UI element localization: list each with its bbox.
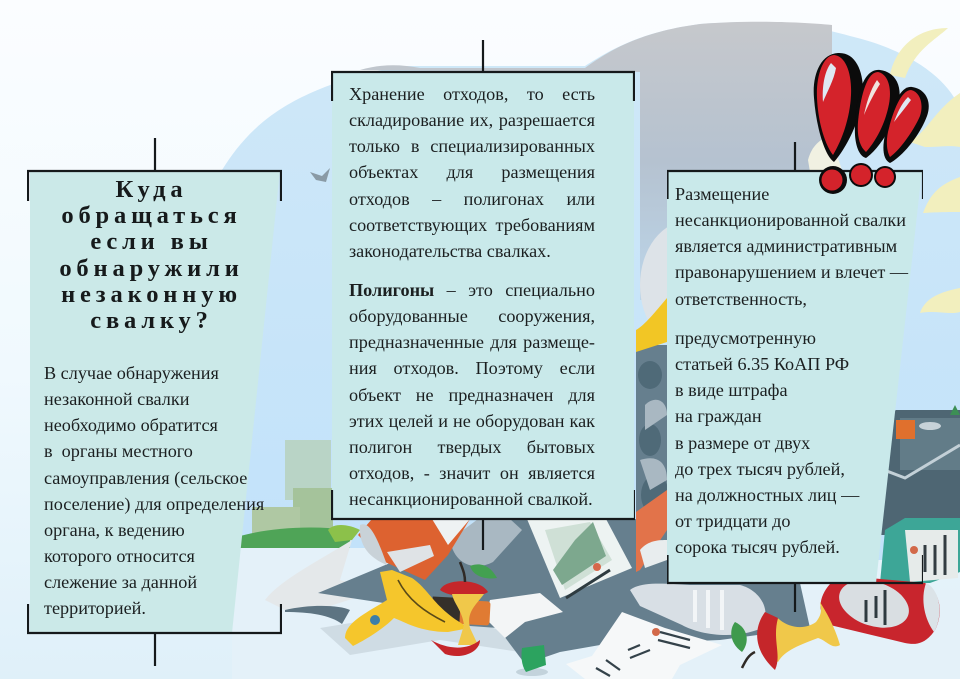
- body text: в органы местного: [44, 441, 193, 461]
- paragraph: fines: статьей 6.35 КоАП РФ: [675, 354, 849, 374]
- paragraph: landfill definition: оборудованные сооружения,: [349, 306, 595, 326]
- panel: storage of waste and landfills: [331, 40, 635, 550]
- teal bottle: [880, 518, 960, 583]
- paragraph: landfill definition: этих целей и не оборудован как: [349, 411, 595, 431]
- apple core left: [431, 562, 497, 656]
- paragraph: fines: на граждан: [675, 406, 762, 426]
- heading: [59, 176, 244, 334]
- body text: слежение за данной: [44, 572, 197, 592]
- paper green: [527, 519, 632, 598]
- paragraph: landfill definition: несанкционированной свалкой.: [349, 489, 593, 509]
- body text: незаконной свалки: [44, 389, 189, 409]
- paragraph: fines: на должностных лиц —: [675, 485, 859, 505]
- red can right: [821, 578, 940, 644]
- body text: [44, 363, 264, 618]
- heading: обращаться: [61, 202, 242, 229]
- paragraph: offence: ответственность,: [675, 288, 807, 308]
- paragraph: waste storage: соответствующих требованиям: [349, 215, 595, 235]
- body text: органа, к ведению: [44, 520, 185, 540]
- heading: обнаружили: [59, 255, 244, 282]
- paragraph: fines: до трех тысяч рублей,: [675, 459, 845, 479]
- paragraph: offence: Размещение: [675, 184, 769, 204]
- paragraph: fines: сорока тысяч рублей.: [675, 537, 840, 557]
- paragraph: landfill definition: полигон твердых бытовых: [349, 437, 595, 457]
- battery right: [880, 410, 960, 535]
- paragraph: offence: правонарушением и влечет —: [675, 262, 908, 282]
- crumpled paper: [485, 593, 563, 638]
- body text: самоуправления (сельское: [44, 468, 247, 488]
- heading: свалку?: [90, 307, 213, 334]
- paragraph: landfill definition: отходов, - значит он является: [349, 463, 595, 483]
- heading: если вы: [90, 228, 213, 255]
- body text: В случае обнаружения: [44, 363, 219, 383]
- paragraph: landfill definition: [349, 280, 595, 509]
- yellow peel behind panel: [636, 298, 667, 352]
- bottle: [630, 584, 766, 635]
- yellow clouds: [890, 28, 960, 313]
- heading: Куда: [116, 176, 187, 203]
- heading: незаконную: [61, 281, 242, 308]
- paragraph: fines: в размере от двух: [675, 432, 810, 452]
- banana: [345, 570, 470, 646]
- paragraph: waste storage: [349, 84, 595, 261]
- paragraph: waste storage: только в специализированных: [349, 136, 595, 156]
- paragraph: waste storage: отходов – полигонах или: [349, 188, 595, 208]
- icon: three red exclamation marks: [814, 53, 929, 194]
- city: [240, 440, 360, 548]
- green cap: [516, 668, 548, 676]
- paragraph: landfill definition: Полигоны – это специально: [349, 280, 595, 300]
- paragraph: landfill definition: предназначенные для размеще-: [349, 332, 595, 352]
- paragraph: offence: несанкционированной свалки: [675, 210, 906, 230]
- paragraph: waste storage: Хранение отходов, то есть: [349, 84, 595, 104]
- body text: необходимо обратится: [44, 415, 218, 435]
- bird: [310, 168, 330, 182]
- grey smog cloud: [360, 22, 832, 300]
- paragraph: fines: [675, 328, 860, 557]
- paragraph: waste storage: складирование их, разрешается: [349, 110, 595, 130]
- body text: территорией.: [44, 598, 146, 618]
- garbage heap: [318, 345, 810, 664]
- body text: поселение) для определения: [44, 494, 264, 514]
- apple core right: [731, 602, 840, 670]
- ground: [232, 548, 960, 679]
- paragraph: fines: от тридцати до: [675, 511, 791, 531]
- panel: where to report an illegal dump: [27, 138, 282, 666]
- paragraph: landfill definition: ния отходов. Поэтому если: [349, 358, 595, 378]
- red can left: [358, 519, 470, 580]
- paragraph: offence: является административным: [675, 236, 897, 256]
- paper bottom: [566, 612, 722, 679]
- small red can under panel: [636, 490, 667, 572]
- paragraph: waste storage: законодательства свалках.: [349, 241, 551, 261]
- paragraph: landfill definition: объект не предназначен для: [349, 384, 595, 404]
- paragraph: fines: в виде штрафа: [675, 380, 788, 400]
- paragraph: offence: [675, 184, 908, 308]
- paragraph: fines: предусмотренную: [675, 328, 816, 348]
- body text: которого относится: [44, 546, 195, 566]
- battery small: [431, 599, 491, 626]
- paragraph: waste storage: объектах для размещения: [349, 162, 595, 182]
- sky dome: [222, 22, 960, 560]
- panel: administrative liability: [667, 142, 923, 612]
